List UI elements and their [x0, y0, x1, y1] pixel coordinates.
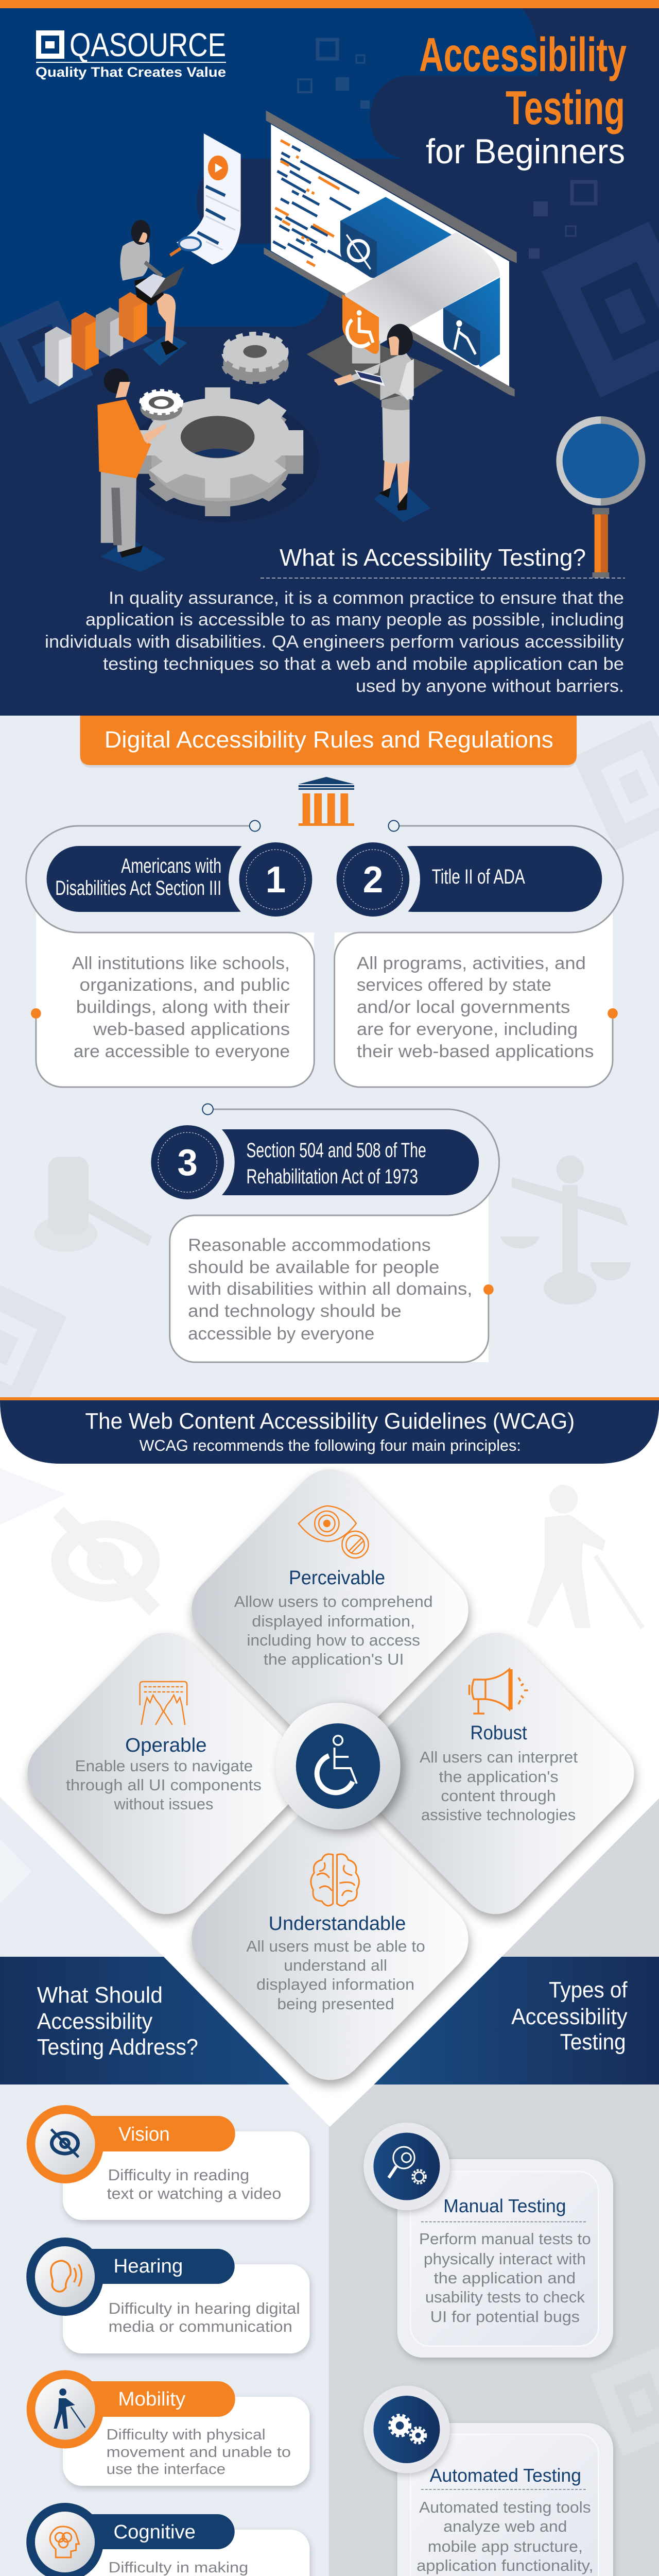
diamond: perceivable: the application's UI [264, 1650, 404, 1668]
diamond: understandable: understand all [284, 1956, 387, 1974]
what is accessibility testing: What is Accessibility Testing? [280, 544, 586, 571]
diamond: understandable: being presented [277, 1995, 394, 2013]
rule 1 text: are accessible to everyone [74, 1042, 290, 1061]
icon: eye slash [51, 2129, 79, 2157]
large gear [126, 387, 319, 522]
standing woman with tablet [334, 324, 430, 522]
card: vision: text or watching a video [107, 2184, 281, 2202]
rule 2 heading: Title II of ADA [432, 866, 525, 888]
card: manual testing: Manual Testing [443, 2196, 566, 2216]
icon: gavel [34, 1157, 152, 1252]
card: vision [27, 2105, 309, 2220]
what is accessibility testing: individuals with disabilities. QA engineers perform various accessibility [45, 632, 624, 652]
presentation screen [264, 110, 517, 405]
rule 2 heading: 2 [363, 859, 383, 901]
diamond: operable: without issues [113, 1795, 213, 1813]
diamond: robust [342, 1618, 649, 1929]
rule 1 text: web-based applications [93, 1020, 290, 1039]
magnifying glass [556, 416, 645, 578]
icon: person with cane [54, 2388, 85, 2429]
icon: gears [390, 2415, 426, 2443]
rule 2 text: services offered by state [357, 975, 551, 995]
diamond: robust: content through [441, 1787, 556, 1805]
rule 1 heading: Americans with [121, 855, 221, 877]
icon: keyboard and hands [140, 1682, 187, 1725]
rule 1 heading [47, 832, 323, 927]
rule 3 text: Reasonable accommodations [188, 1235, 431, 1255]
card: mobility: Difficulty with physical [107, 2427, 266, 2443]
diamond: understandable: All users must be able to [246, 1937, 425, 1955]
floor and orange panel [307, 295, 443, 405]
card: cognitive: Difficulty in making [109, 2560, 248, 2576]
rule 2 text: their web-based applications [357, 1042, 594, 1061]
diamond: understandable: Understandable [269, 1912, 406, 1934]
card: cognitive: Cognitive [113, 2521, 196, 2543]
diamond: operable [13, 1618, 319, 1929]
orange rule [0, 1397, 659, 1400]
diamond: robust: assistive technologies [421, 1806, 576, 1824]
card: automated testing: mobile app structure, [428, 2537, 583, 2555]
icon: faded person with cane [527, 1485, 643, 1628]
icon: scales [500, 1156, 631, 1304]
card: mobility: use the interface [107, 2461, 226, 2478]
diamond: perceivable: Perceivable [289, 1567, 385, 1588]
card: hearing [26, 2238, 309, 2353]
card: manual testing: UI for potential bugs [430, 2308, 580, 2326]
band: section headings [0, 1957, 659, 2084]
rule 3 text: and technology should be [188, 1301, 402, 1321]
card: mobility: Mobility [118, 2388, 185, 2410]
card: cognitive [26, 2503, 309, 2576]
rule 1 and 2 cards [26, 820, 623, 1087]
blue panel with eye icon [340, 197, 452, 278]
icon: brain [311, 1854, 359, 1906]
small gear [223, 335, 287, 382]
logo: Quality That Creates Value [36, 64, 226, 80]
rule 2 heading [326, 832, 602, 927]
band: section headings: Accessibility [511, 2004, 628, 2029]
rule 3 heading: 3 [177, 1142, 198, 1183]
what is accessibility testing: testing techniques so that a web and mobile application can be [103, 654, 624, 674]
card: manual testing [363, 2123, 613, 2358]
bar chart [44, 292, 153, 386]
diamond: understandable [177, 1784, 483, 2095]
rule 3 text: with disabilities within all domains, [187, 1279, 472, 1299]
what is accessibility testing: used by anyone without barriers. [356, 676, 624, 696]
card: hearing: media or communication [109, 2317, 292, 2335]
main content: rules, guidelines and address sections [0, 716, 659, 2576]
card: automated testing: Automated Testing [430, 2465, 581, 2486]
band: section headings: Testing Address? [37, 2035, 198, 2060]
card: mobility [27, 2370, 309, 2486]
logo: QASOURCE [70, 26, 226, 63]
rule 3 heading: Rehabilitation Act of 1973 [246, 1165, 418, 1188]
heading: WCAG: WCAG recommends the following four main principles: [140, 1436, 521, 1454]
icon: eye with ban [299, 1506, 369, 1558]
what is accessibility testing: In quality assurance, it is a common practice to ensure that the [109, 588, 624, 608]
card: hearing: Hearing [113, 2255, 183, 2277]
man with gear [97, 368, 182, 572]
rule 3 text: should be available for people [188, 1258, 439, 1277]
seated woman with laptop [120, 220, 187, 366]
panel: WCAG [0, 1397, 659, 1957]
diamond: operable: Operable [125, 1734, 207, 1756]
card: manual testing: Perform manual tests to [419, 2230, 591, 2248]
title: for Beginners [426, 132, 625, 171]
rule 1 text [72, 954, 290, 1061]
diamond: perceivable: displayed information, [252, 1612, 415, 1630]
icon: central wheelchair badge [275, 1703, 401, 1829]
band: section headings: Testing [560, 2029, 626, 2055]
what is accessibility testing: application is accessible to as many people as possible, including [85, 610, 624, 630]
rule 2 text: All programs, activities, and [357, 954, 586, 973]
card: automated testing [363, 2385, 613, 2576]
diamond: perceivable [177, 1454, 483, 1766]
band: section headings: What Should [37, 1982, 163, 2008]
card: automated testing: application functionality, [417, 2556, 594, 2574]
document [170, 133, 241, 264]
rule 1 heading: 1 [266, 859, 286, 901]
icon: megaphone [469, 1669, 528, 1714]
card: manual testing: physically interact with [424, 2250, 586, 2268]
what is accessibility testing [45, 544, 625, 696]
heading: WCAG: The Web Content Accessibility Guidelines (WCAG) [85, 1409, 575, 1434]
rule 3 text: accessible by everyone [188, 1324, 374, 1344]
heading: rules: Digital Accessibility Rules and Regulations [105, 727, 553, 753]
card: vision: Difficulty in reading [108, 2166, 249, 2184]
icon: government building [293, 777, 360, 835]
diamond: perceivable: including how to access [247, 1631, 420, 1649]
icon: magnifier and gears [389, 2147, 426, 2183]
panel: rules and regulations [0, 716, 659, 1415]
silver tube [344, 232, 500, 345]
rule 3 heading: Section 504 and 508 of The [246, 1139, 426, 1162]
rule 3 card [141, 1104, 499, 1362]
blue panel with cane icon [443, 277, 500, 367]
hero panel [0, 0, 659, 716]
heading: WCAG [0, 1400, 659, 1464]
logo [36, 26, 226, 80]
diamond: perceivable: Allow users to comprehend [234, 1592, 433, 1611]
hero illustration [44, 110, 645, 578]
diamond: operable: Enable users to navigate [75, 1757, 253, 1775]
icon: faded eye [58, 1512, 154, 1610]
diamond: robust: the application's [439, 1768, 559, 1786]
WCAG principle diamonds [13, 1454, 649, 2095]
card: mobility: movement and unable to [107, 2444, 291, 2461]
rule 1 text: buildings, along with their [76, 997, 290, 1017]
diamond: understandable: displayed information [256, 1975, 414, 1993]
card: manual testing: the application and [434, 2269, 576, 2287]
rule 1 text: organizations, and public [80, 975, 290, 995]
rule 2 text [357, 954, 594, 1061]
card: automated testing: Automated testing tools [419, 2498, 591, 2516]
rule 3 heading [141, 1114, 479, 1210]
rule 2 text: are for everyone, including [357, 1020, 578, 1039]
panel: what to address [0, 2084, 659, 2576]
diamond: robust: Robust [470, 1722, 527, 1743]
rule 3 text [187, 1235, 472, 1344]
diamond: operable: through all UI components [66, 1776, 262, 1794]
heading: rules [80, 716, 577, 768]
card: automated testing: analyze web and [443, 2517, 567, 2535]
title [419, 28, 627, 171]
rule 1 text: All institutions like schools, [72, 954, 290, 973]
rule 1 heading: Disabilities Act Section III [55, 877, 221, 900]
card: manual testing: usability tests to check [425, 2288, 585, 2306]
rule 2 text: and/or local governments [357, 997, 570, 1017]
diamond: robust: All users can interpret [420, 1748, 578, 1766]
card: vision: Vision [118, 2123, 170, 2145]
band: section headings: Types of [549, 1977, 628, 2003]
icon: head with brain [50, 2527, 79, 2557]
band: section headings: Accessibility [37, 2009, 152, 2034]
icon: ear [51, 2261, 81, 2292]
card: hearing: Difficulty in hearing digital [109, 2299, 300, 2317]
